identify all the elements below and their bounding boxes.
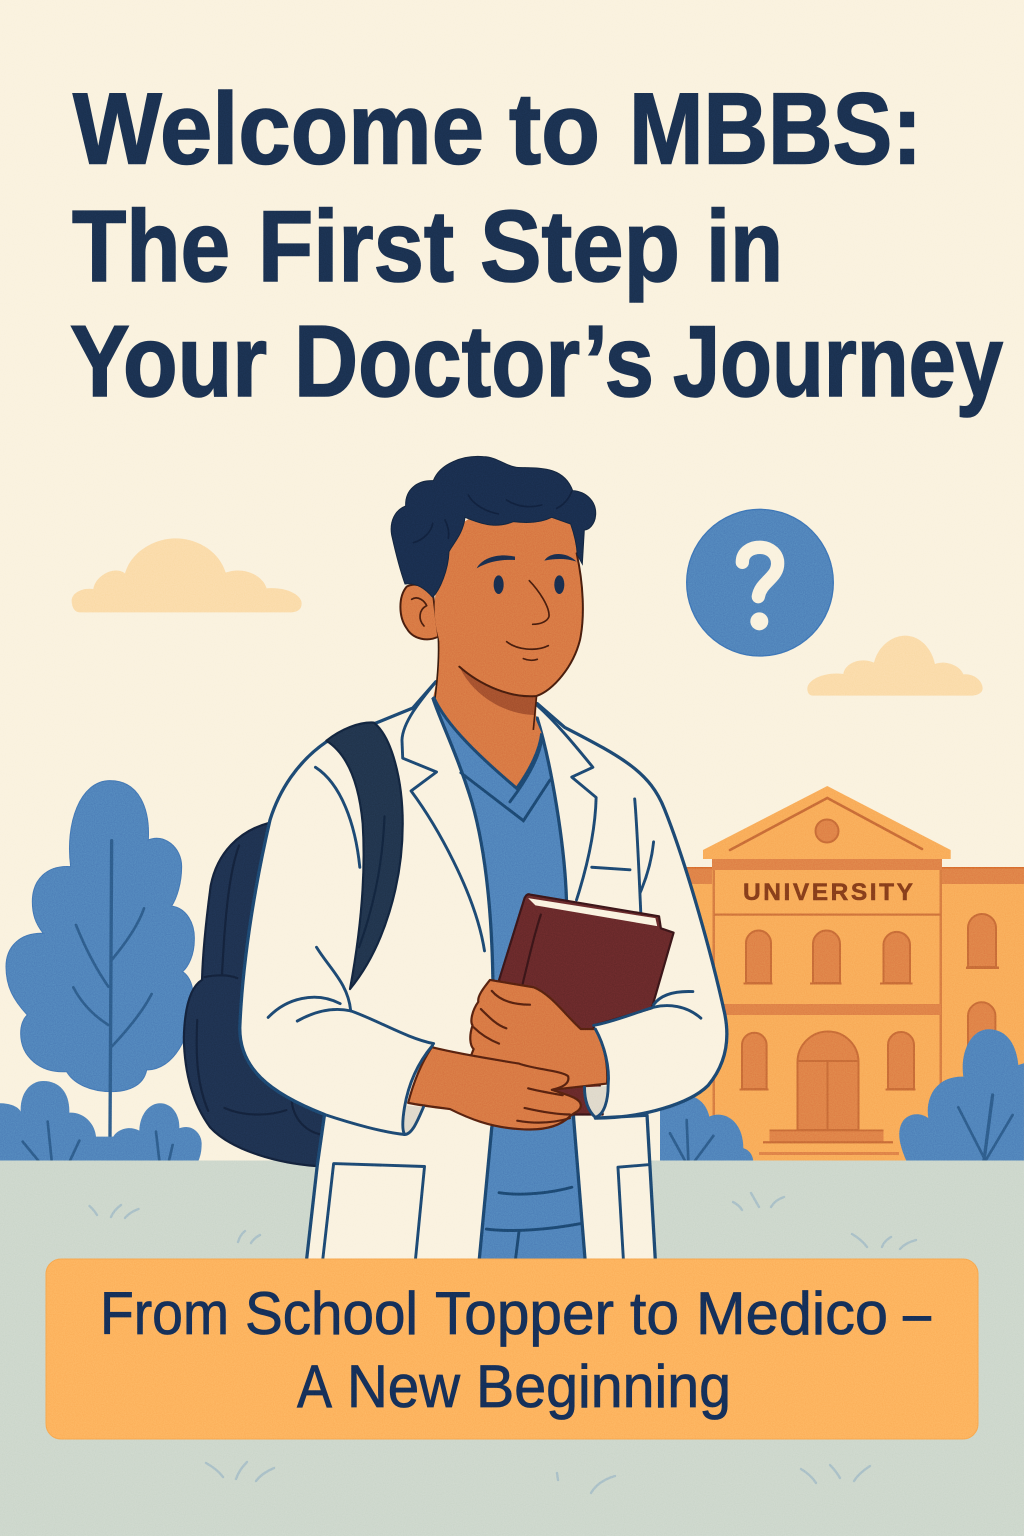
bush: bottom right <box>899 1029 1024 1162</box>
lower hand <box>408 1047 581 1129</box>
banner text: School <box>245 1280 418 1347</box>
head <box>391 456 596 788</box>
windows <box>740 930 916 1090</box>
neck <box>433 637 542 788</box>
face <box>435 505 583 696</box>
hands <box>408 980 607 1129</box>
bush: behind coat <box>660 1095 753 1162</box>
backpack strap <box>326 722 403 989</box>
title: First <box>258 191 454 303</box>
book <box>499 894 674 1115</box>
banner text: A <box>297 1353 332 1420</box>
title: in <box>706 191 783 303</box>
banner text: Beginning <box>476 1353 731 1420</box>
coat lapels, seams and pockets <box>268 682 654 1260</box>
banner text: New <box>347 1353 461 1420</box>
ear <box>400 585 438 639</box>
title: Your <box>70 306 267 418</box>
sign: university: UNIVERSITY <box>743 879 913 906</box>
title: MBBS: <box>629 74 922 186</box>
banner <box>46 1259 978 1439</box>
banner text: Medico <box>696 1280 888 1347</box>
building front <box>712 859 942 1161</box>
pediment <box>703 786 951 859</box>
lab coat <box>240 682 727 1262</box>
university building <box>680 786 1024 1161</box>
tree <box>6 781 194 1137</box>
bush: bottom left <box>0 1081 202 1162</box>
cloud: left <box>72 538 302 612</box>
icon: question mark bubble <box>687 509 833 656</box>
title <box>70 74 1003 418</box>
title: The <box>72 191 230 303</box>
hair <box>391 456 596 597</box>
door and steps <box>759 1032 899 1155</box>
scrubs <box>434 700 585 1262</box>
grass tufts <box>90 1193 916 1493</box>
title: Step <box>480 191 680 303</box>
title: Doctor’s <box>294 306 654 418</box>
banner text: to <box>630 1280 679 1347</box>
banner text: Topper <box>435 1280 614 1347</box>
banner text: From <box>100 1280 229 1347</box>
banner text <box>100 1280 932 1420</box>
banner text: – <box>903 1280 932 1347</box>
student figure <box>184 456 727 1262</box>
title: Welcome <box>73 74 484 186</box>
sleeve cuffs <box>403 992 701 1135</box>
cloud: right <box>807 636 983 696</box>
building wings <box>680 867 1024 1161</box>
ground <box>0 1160 1024 1536</box>
title: to <box>509 74 600 186</box>
upper hand <box>470 980 607 1090</box>
backpack <box>184 823 330 1166</box>
